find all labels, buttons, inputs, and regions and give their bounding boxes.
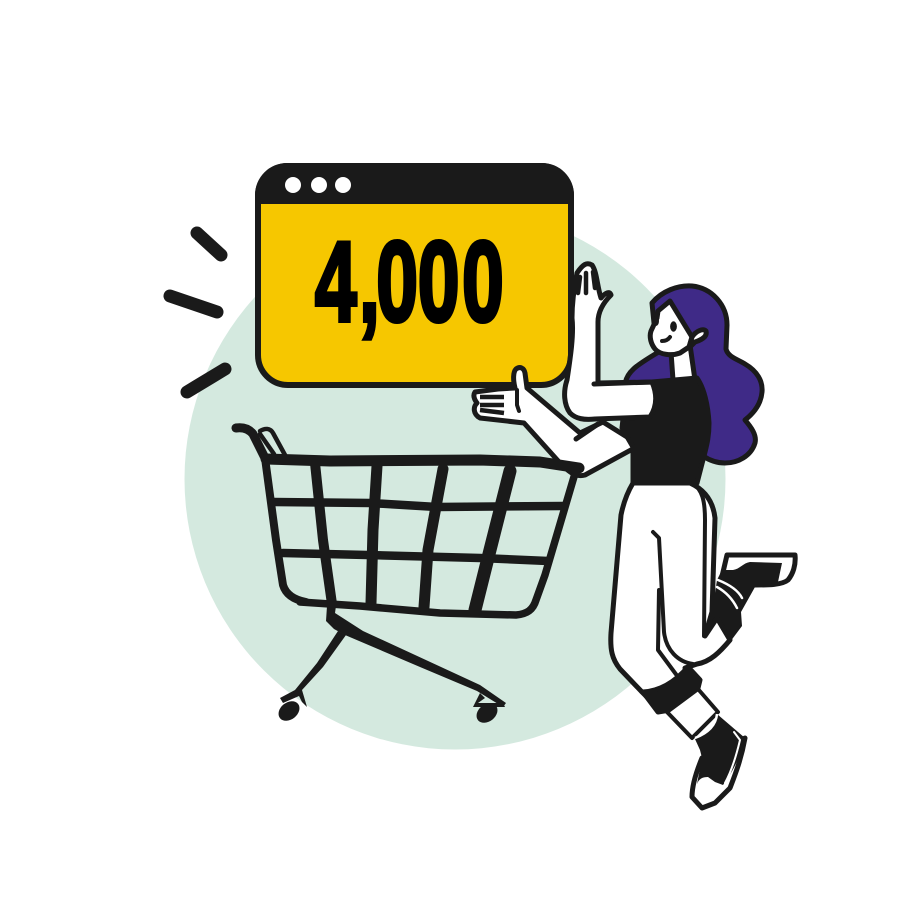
- window dots: [285, 177, 351, 193]
- cart handle: [236, 428, 285, 458]
- cart base: [280, 606, 506, 707]
- neck: [671, 345, 695, 380]
- cart basket: [265, 458, 579, 615]
- pants: [611, 483, 730, 710]
- ear: [689, 330, 706, 348]
- pant cuff: [643, 667, 700, 712]
- upper arm and hand: [565, 264, 656, 419]
- shopping cart: [236, 428, 579, 727]
- background circle: [184, 208, 726, 750]
- lower arm and hand: [474, 368, 640, 476]
- browser window: [255, 163, 574, 385]
- cart wheels: [275, 697, 501, 727]
- number: 4,000: [315, 219, 504, 346]
- front leg sock: [667, 689, 718, 738]
- face: [650, 301, 692, 355]
- woman: [474, 264, 795, 808]
- black top: [622, 378, 709, 483]
- window title bar: [255, 163, 574, 204]
- front sneaker: [692, 714, 745, 808]
- eyes and smile: [653, 316, 677, 332]
- hair: [625, 286, 762, 463]
- back leg and sneaker: [705, 555, 795, 642]
- burst lines: [170, 233, 225, 392]
- sleeve fold: [576, 424, 598, 439]
